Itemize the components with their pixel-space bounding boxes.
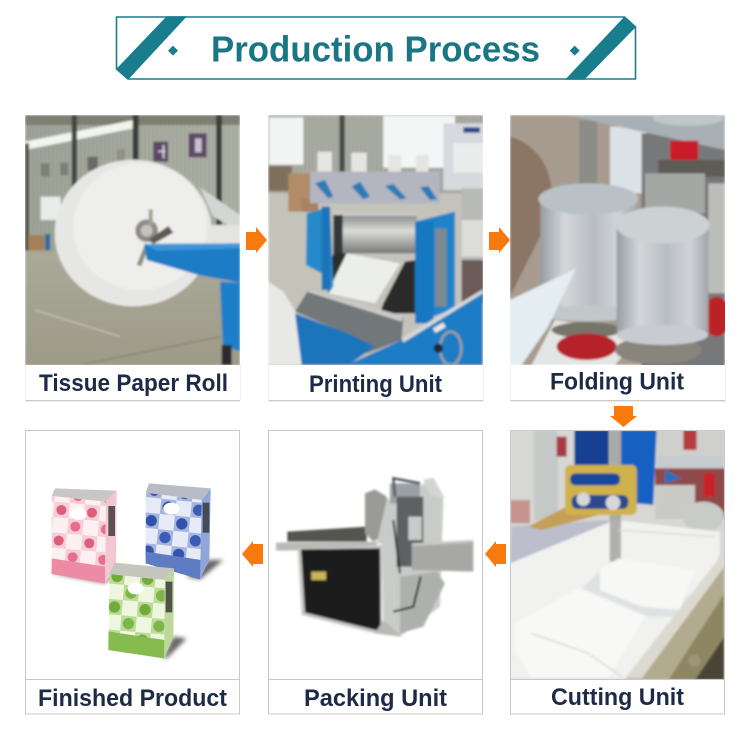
panel frame <box>26 430 240 714</box>
caption: Cutting Unit: Cutting Unit <box>551 684 684 711</box>
arrow: cutting to packing <box>485 541 506 567</box>
panel frame <box>268 430 482 714</box>
photo: packing machine <box>276 477 473 637</box>
caption: Folding Unit: Folding Unit <box>550 368 684 396</box>
photo: paper roll on blue stand <box>25 115 240 366</box>
pack: green <box>108 563 187 658</box>
caption: Printing Unit <box>268 365 484 401</box>
panel: cutting unit <box>510 430 725 714</box>
caption: Finished Product: Finished Product <box>38 685 227 712</box>
arrow: roll to printing <box>246 227 267 253</box>
panel: finished product <box>26 430 240 714</box>
panel: printing unit <box>268 115 484 401</box>
arrow: folding to cutting <box>610 406 637 427</box>
arrow: packing to finished product <box>242 541 263 567</box>
caption: Packing Unit: Packing Unit <box>304 685 447 712</box>
title banner <box>116 16 636 80</box>
panel: tissue paper roll <box>25 115 241 401</box>
photo: three tissue packs <box>52 483 223 658</box>
photo: stacked tissue sheets under cutter <box>510 430 725 680</box>
caption: Tissue Paper Roll: Tissue Paper Roll <box>39 370 228 397</box>
photo: knurled folding cylinders <box>510 111 730 367</box>
caption: Printing Unit: Printing Unit <box>309 371 442 398</box>
caption: Cutting Unit <box>510 430 724 714</box>
panel: folding unit <box>510 111 730 401</box>
title text: Production Process <box>211 28 540 70</box>
pack: pink <box>52 488 120 583</box>
pack: blue <box>146 483 223 579</box>
panel: packing unit <box>268 430 482 714</box>
photo: blue printing machine <box>268 115 483 367</box>
caption: Folding Unit <box>510 365 726 401</box>
arrow: printing to folding <box>489 227 510 253</box>
caption: Tissue Paper Roll <box>25 365 241 401</box>
